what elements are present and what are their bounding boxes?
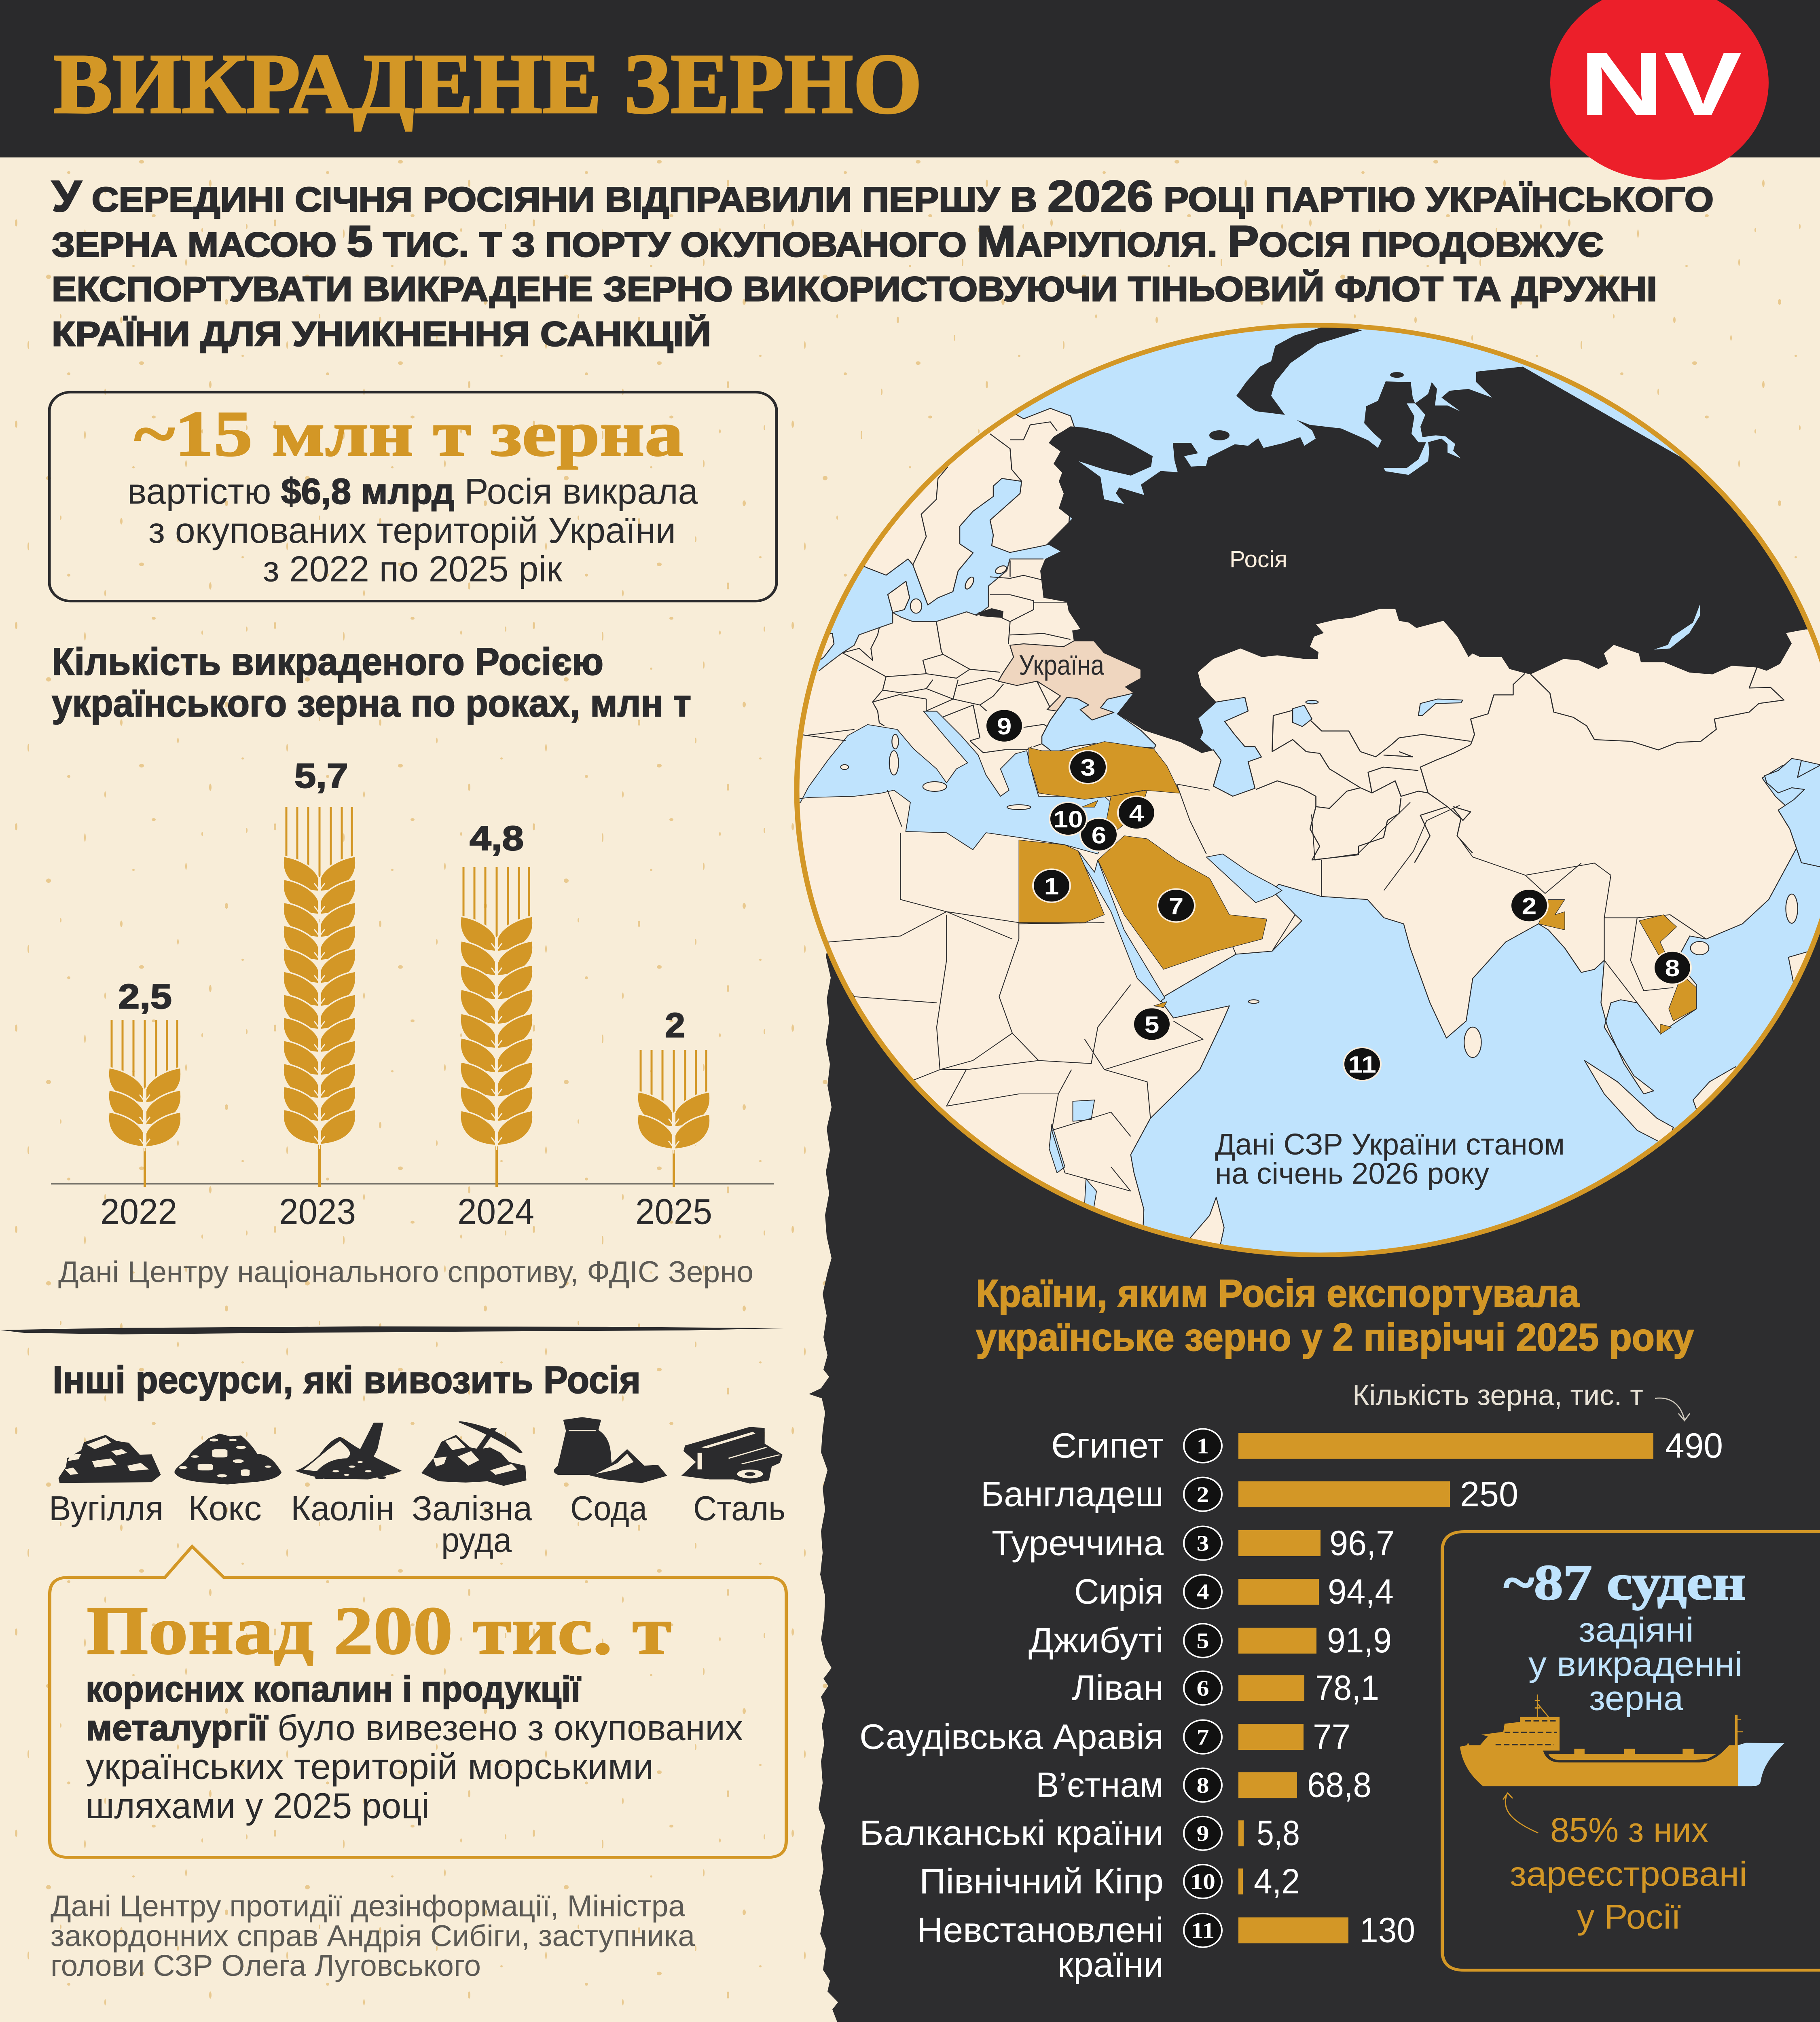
resource labels: руда <box>441 1521 512 1559</box>
row: Djibouti: 91,9 <box>1327 1620 1392 1660</box>
row: unidentified countries: 11 <box>1191 1918 1215 1943</box>
map seas: Mediterranean <box>775 711 1111 854</box>
row: Turkey: 3 <box>1196 1531 1209 1556</box>
row: Lebanon <box>1072 1668 1379 1707</box>
map <box>762 324 1820 1288</box>
callout: over 200 thousand tonnes: корисних копалин і продукції <box>86 1669 581 1709</box>
source note: resources <box>51 1889 695 1982</box>
wheat 2023: 5,7 <box>294 757 348 795</box>
wheat 2022: 2022 <box>100 1192 177 1232</box>
source note: resources: Дані Центру протидії дезінформації, Міністра <box>51 1889 686 1923</box>
resource labels: Сталь <box>693 1489 785 1528</box>
panel: ships <box>1442 1532 1820 1970</box>
source note: resources: голови СЗР Олега Луговського <box>51 1949 481 1982</box>
wheat 2023: 2023 <box>279 1192 356 1232</box>
wheat 2025 <box>635 1006 712 1232</box>
intro text block <box>52 172 1714 353</box>
map source note: на січень 2026 року <box>1215 1156 1489 1190</box>
map markers <box>986 709 1691 1081</box>
panel: ships: зерна <box>1589 1679 1683 1717</box>
row: Vietnam: В’єтнам <box>1036 1765 1164 1804</box>
wheat 2024: 2024 <box>457 1192 534 1232</box>
map land: continental Europe <box>813 558 1047 684</box>
map markers: 8 <box>1665 955 1680 981</box>
panel: ships: зареєстровані <box>1510 1855 1747 1893</box>
row: Saudi Arabia <box>859 1717 1350 1756</box>
row: Bangladesh: 2 <box>1196 1482 1209 1507</box>
row: Syria: Сирія <box>1074 1571 1164 1611</box>
map markers: 3 <box>1081 755 1095 781</box>
row: Egypt: 490 <box>1665 1426 1723 1465</box>
source note: resources: закордонних справ Андрія Сибіги, заступника <box>51 1919 695 1952</box>
row: Northern Cyprus: Північний Кіпр <box>919 1861 1164 1901</box>
map land: Asia and Africa <box>799 609 1820 1225</box>
row: Lebanon: 6 <box>1196 1676 1209 1701</box>
panel: ships: задіяні <box>1579 1611 1694 1649</box>
callout: over 200 thousand tonnes: металургії було вивезено з окупованих <box>86 1708 743 1748</box>
icon: coal <box>59 1435 161 1483</box>
row: Turkey: 96,7 <box>1329 1523 1395 1563</box>
panel: ships: у Росії <box>1577 1898 1681 1936</box>
icon: steel <box>681 1427 783 1484</box>
row: Balkan countries: 9 <box>1196 1821 1209 1846</box>
map markers: 4 <box>1129 800 1144 827</box>
row: Saudi Arabia: 77 <box>1313 1717 1350 1756</box>
row: Egypt: Єгипет <box>1051 1426 1164 1465</box>
map: Europe borders <box>802 422 1071 753</box>
map markers: 9 <box>997 713 1012 740</box>
row: Vietnam: 68,8 <box>1307 1765 1371 1804</box>
heading: other resources: Інші ресурси, які вивозить Росія <box>53 1359 641 1401</box>
resource labels: Сода <box>570 1489 647 1528</box>
icon: iron ore <box>421 1422 527 1486</box>
map: Central Asia borders and lakes <box>1256 667 1820 874</box>
resource labels: Вугілля <box>49 1489 163 1528</box>
icon: ship <box>1460 1694 1784 1786</box>
logo: NV: NV <box>1579 34 1742 134</box>
map label: Ukraine: Україна <box>1019 649 1105 681</box>
wheat 2024: 4,8 <box>470 819 524 858</box>
row: Saudi Arabia: 7 <box>1196 1725 1209 1749</box>
map markers: 6 <box>1092 822 1106 848</box>
map land: Scandinavia <box>864 408 1075 606</box>
panel: ships: у викраденні <box>1528 1645 1743 1684</box>
map markers: 7 <box>1169 893 1183 920</box>
panel: 15 million tonnes: з 2022 по 2025 рік <box>263 549 563 589</box>
bar chart: countries <box>859 1426 1723 1984</box>
wheat 2025: 2025 <box>635 1192 712 1232</box>
map markers: 5 <box>1145 1011 1159 1038</box>
icon: soda sack <box>554 1417 667 1483</box>
resource labels: Залізна <box>412 1489 532 1528</box>
row: Bangladesh <box>981 1474 1518 1514</box>
row: Syria <box>1074 1571 1394 1611</box>
map markers: 10 <box>1053 806 1083 833</box>
row: Egypt <box>1051 1426 1723 1465</box>
row: Northern Cyprus <box>919 1861 1300 1901</box>
callout: over 200 thousand tonnes: Понад 200 тис. т <box>87 1593 671 1669</box>
row: Lebanon: 78,1 <box>1315 1668 1379 1707</box>
map: Africa and South Asia borders <box>805 730 1706 1191</box>
row: Northern Cyprus: 4,2 <box>1254 1861 1300 1901</box>
heading: export countries: Країни, яким Росія експортувала <box>976 1272 1580 1315</box>
row: Syria: 4 <box>1196 1580 1209 1604</box>
logo: NV <box>1550 0 1769 180</box>
heading: stolen grain by year: українського зерна по роках, млн т <box>52 682 691 725</box>
map seas: Persian Gulf <box>1206 854 1282 903</box>
map source note <box>1215 1127 1565 1190</box>
row: Syria: 94,4 <box>1328 1571 1394 1611</box>
heading: stolen grain by year <box>52 641 691 725</box>
row: Djibouti: 5 <box>1196 1629 1209 1653</box>
wheat 2023 <box>279 757 356 1232</box>
heading: export countries: українське зерно у 2 півріччі 2025 року <box>976 1316 1694 1359</box>
wheat chart <box>51 757 774 1232</box>
row: Egypt: 1 <box>1196 1434 1209 1458</box>
title: ВИКРАДЕНЕ ЗЕРНО <box>53 36 922 131</box>
panel: 15 million tonnes: вартістю $6,8 млрд Росія викрала <box>127 471 698 512</box>
wheat 2022 <box>100 977 181 1232</box>
map: highlighted countries <box>1019 742 1696 1034</box>
heading: export countries <box>976 1272 1694 1359</box>
callout: over 200 thousand tonnes: шляхами у 2025 році <box>86 1786 430 1826</box>
panel: 15 million tonnes: ~15 млн т зерна <box>134 398 684 470</box>
row: Balkan countries: Балканські країни <box>859 1813 1164 1853</box>
row: Bangladesh: 250 <box>1460 1474 1518 1514</box>
row: unidentified countries: Невстановлені <box>917 1910 1164 1950</box>
resource labels <box>49 1489 785 1559</box>
unit note with arrow: Кількість зерна, тис. т <box>1352 1379 1643 1412</box>
row: unidentified countries: країни <box>1058 1945 1164 1984</box>
intro text block: ЕКСПОРТУВАТИ ВИКРАДЕНЕ ЗЕРНО ВИКОРИСТОВУЮЧИ ТІНЬОВИЙ ФЛОТ ТА ДРУЖНІ <box>52 269 1657 309</box>
map islands: Denmark, UK, Baltic <box>805 564 1008 663</box>
map: Russia <box>978 324 1820 753</box>
map label: Russia: Росія <box>1230 546 1287 573</box>
map seas: Black Sea <box>1042 693 1156 753</box>
dark lower right panel with torn edge <box>809 891 1820 2022</box>
row: unidentified countries: 130 <box>1360 1910 1415 1950</box>
intro text block: КРАЇНИ ДЛЯ УНИКНЕННЯ САНКЦІЙ <box>52 314 711 353</box>
map: islands and lakes <box>840 734 1820 1270</box>
resource icons <box>59 1417 783 1486</box>
panel: ships: 85% з них <box>1550 1811 1708 1849</box>
row: Northern Cyprus: 10 <box>1190 1869 1215 1894</box>
callout: over 200 thousand tonnes <box>50 1546 786 1857</box>
callout: over 200 thousand tonnes: українських територій морськими <box>86 1747 654 1787</box>
intro text block: ЗЕРНА МАСОЮ 5 ТИС. Т З ПОРТУ ОКУПОВАНОГО МАРІУПОЛЯ. РОСІЯ ПРОДОВЖУЄ <box>52 217 1604 266</box>
panel: ships: ~87 суден <box>1504 1555 1746 1610</box>
wheat 2025: 2 <box>665 1006 685 1045</box>
icon: coke <box>174 1434 281 1485</box>
row: Saudi Arabia: Саудівська Аравія <box>859 1717 1164 1756</box>
intro text block: У СЕРЕДИНІ СІЧНЯ РОСІЯНИ ВІДПРАВИЛИ ПЕРШУ В 2026 РОЦІ ПАРТІЮ УКРАЇНСЬКОГО <box>52 172 1714 221</box>
resource labels: Кокс <box>188 1489 262 1528</box>
row: Djibouti: Джибуті <box>1029 1620 1164 1660</box>
map markers: 2 <box>1522 893 1536 920</box>
wheat 2024 <box>457 819 534 1232</box>
row: unidentified countries <box>917 1910 1415 1984</box>
heading: stolen grain by year: Кількість викраденого Росією <box>52 641 603 683</box>
map: Ukraine <box>998 641 1141 720</box>
row: Lebanon: Ліван <box>1072 1668 1164 1707</box>
map seas: Caspian <box>1198 697 1261 796</box>
row: Bangladesh: Бангладеш <box>981 1474 1164 1514</box>
map markers: 1 <box>1044 873 1059 900</box>
icon: kaolin <box>295 1423 402 1479</box>
row: Djibouti <box>1029 1620 1392 1660</box>
row: Turkey: Туреччина <box>992 1523 1164 1563</box>
resource labels: Каолін <box>291 1489 394 1528</box>
row: Balkan countries: 5,8 <box>1257 1813 1300 1853</box>
wheat 2022: 2,5 <box>118 977 172 1016</box>
header band <box>0 0 1820 157</box>
map seas: Red Sea <box>1078 851 1165 1002</box>
panel: 15 million tonnes: з окупованих територій України <box>148 510 676 551</box>
source note: chart: Дані Центру національного спротиву, ФДІС Зерно <box>58 1255 753 1289</box>
row: Vietnam: 8 <box>1196 1773 1209 1798</box>
map source note: Дані СЗР України станом <box>1215 1127 1565 1161</box>
row: Vietnam <box>1036 1765 1371 1804</box>
panel: 15 million tonnes <box>49 392 777 601</box>
map markers: 11 <box>1348 1051 1376 1078</box>
row: Turkey <box>992 1523 1395 1563</box>
